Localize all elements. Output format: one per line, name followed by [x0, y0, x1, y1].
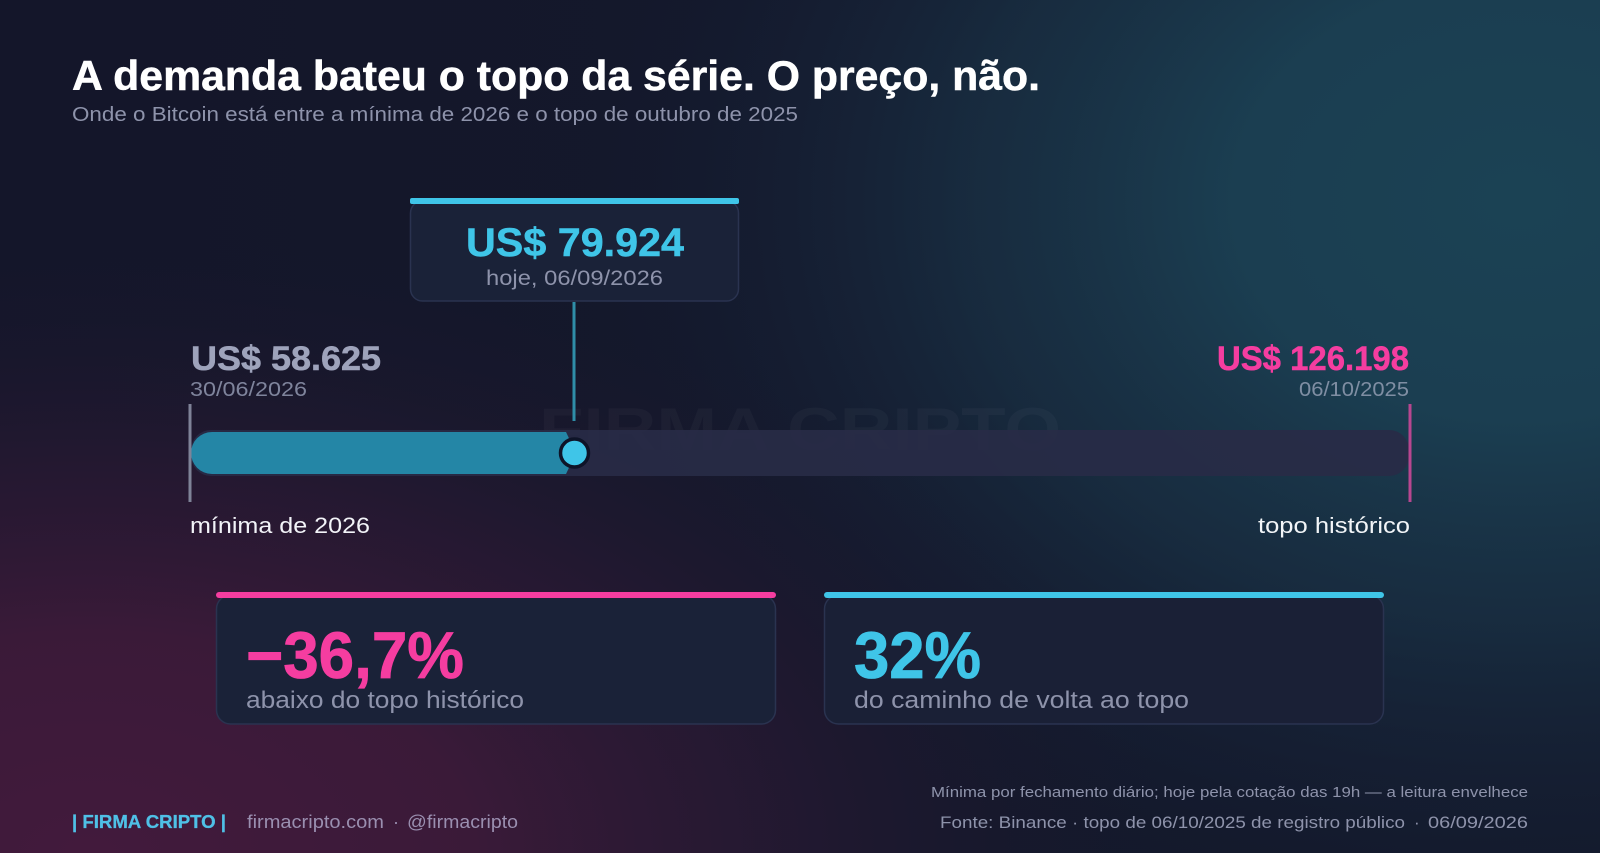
source line: Fonte: Binance · topo de 06/10/2025 de registro público	[940, 813, 1405, 832]
label: topo: topo histórico	[1258, 513, 1410, 538]
callout: current price	[410, 198, 739, 301]
footer brand: | FIRMA CRIPTO |	[72, 812, 226, 832]
title: A demanda bateu o topo da série. O preço, não.	[72, 52, 1040, 99]
label: 2026 low price: US$ 58.625	[191, 340, 381, 378]
right tick	[1408, 404, 1412, 502]
current price date: hoje, 06/09/2026	[486, 267, 663, 290]
connector line	[572, 302, 576, 421]
stat label: abaixo do topo histórico	[246, 687, 524, 714]
footer links: @firmacripto	[407, 812, 518, 832]
marker dot	[560, 439, 588, 467]
label: 2026 low price	[190, 340, 381, 401]
subtitle: Onde o Bitcoin está entre a mínima de 2026 e o topo de outubro de 2025	[72, 104, 798, 126]
card: below high	[216, 592, 776, 724]
label: 2026 low price: 30/06/2026	[190, 379, 307, 401]
price range bar	[188, 404, 1412, 502]
footnote: Mínima por fechamento diário; hoje pela cotação das 19h — a leitura envelhece	[931, 784, 1528, 801]
label: all-time high price: US$ 126.198	[1217, 340, 1409, 378]
current price value: US$ 79.924	[466, 221, 685, 265]
footer links: ·	[393, 812, 399, 832]
bar track	[191, 430, 1409, 476]
label: all-time high price: 06/10/2025	[1299, 379, 1409, 401]
left tick	[188, 404, 192, 502]
stat value: 32%	[854, 618, 981, 692]
watermark: FIRMA CRIPTO	[539, 396, 1061, 463]
stat value: −36,7%	[246, 618, 464, 692]
card: path back	[824, 592, 1384, 724]
stat label: do caminho de volta ao topo	[854, 687, 1189, 714]
bar fill	[191, 432, 576, 474]
source line: ·	[1414, 813, 1420, 832]
label: minima: mínima de 2026	[190, 513, 370, 538]
source line: 06/09/2026	[1428, 813, 1528, 832]
label: all-time high price	[1217, 340, 1409, 401]
footer links	[247, 812, 518, 832]
footer links: firmacripto.com	[247, 812, 384, 832]
